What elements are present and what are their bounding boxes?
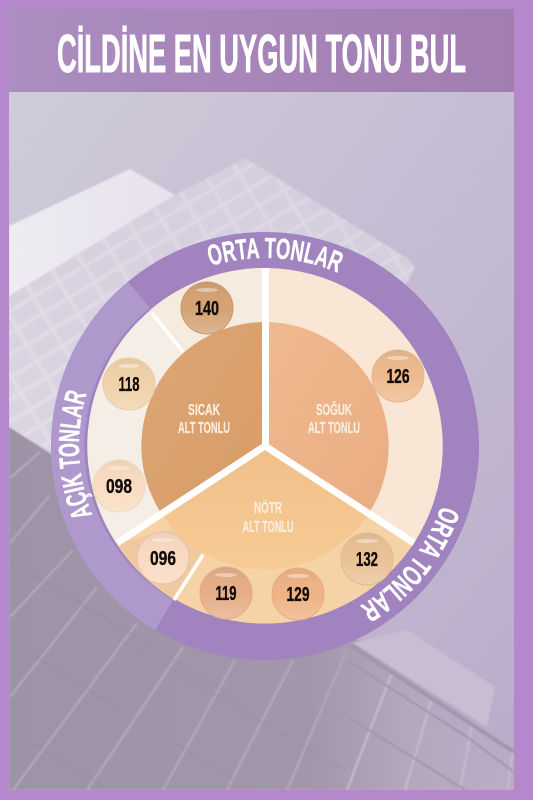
swatch 119: 119 <box>216 583 236 605</box>
label: warm undertone: ALT TONLU <box>178 420 230 437</box>
label: warm undertone: SICAK <box>188 402 220 419</box>
label: warm undertone <box>178 402 230 437</box>
label: neutral undertone: ALT TONLU <box>242 519 294 536</box>
ring <box>51 232 479 660</box>
title banner <box>9 9 514 92</box>
label: lower right medium tones: ORTA TONLAR <box>360 508 458 621</box>
sector: neutral light band <box>116 520 220 599</box>
ring: light tones segment <box>51 282 173 630</box>
swatch 096: 096 <box>150 548 176 570</box>
tone wheel <box>51 232 479 660</box>
swatch 132: 132 <box>356 549 378 571</box>
sector: cool outer band <box>265 268 443 543</box>
swatch 129 <box>272 568 324 620</box>
label: neutral undertone <box>242 498 294 536</box>
inner sector: cool <box>265 322 389 513</box>
swatch 118: 118 <box>118 374 140 396</box>
swatch 140 <box>181 282 233 334</box>
label: cool undertone <box>308 400 360 437</box>
label: cool undertone: SOĞUK <box>316 400 352 419</box>
swatch 126: 126 <box>386 366 410 388</box>
swatch 098: 098 <box>106 476 132 498</box>
swatch 119 <box>200 567 252 619</box>
label: neutral undertone: NÖTR <box>254 498 282 517</box>
swatch 140: 140 <box>195 298 219 320</box>
swatch 118 <box>103 358 155 410</box>
swatch 096 <box>137 532 189 584</box>
swatch 129: 129 <box>286 584 310 606</box>
sector: warm medium band <box>150 268 265 446</box>
inner sector: warm <box>141 322 265 513</box>
swatch 098 <box>93 460 145 512</box>
swatch 132 <box>341 533 393 585</box>
label: top medium tones: ORTA TONLAR <box>208 238 343 273</box>
label: cool undertone: ALT TONLU <box>308 420 360 437</box>
sector: warm outer band <box>87 268 265 543</box>
inner sector: neutral <box>161 446 369 569</box>
sector: neutral outer band <box>116 446 414 624</box>
swatch 126 <box>372 350 424 402</box>
dividers <box>117 268 414 600</box>
label: light tones: AÇIK TONLAR <box>58 390 92 518</box>
